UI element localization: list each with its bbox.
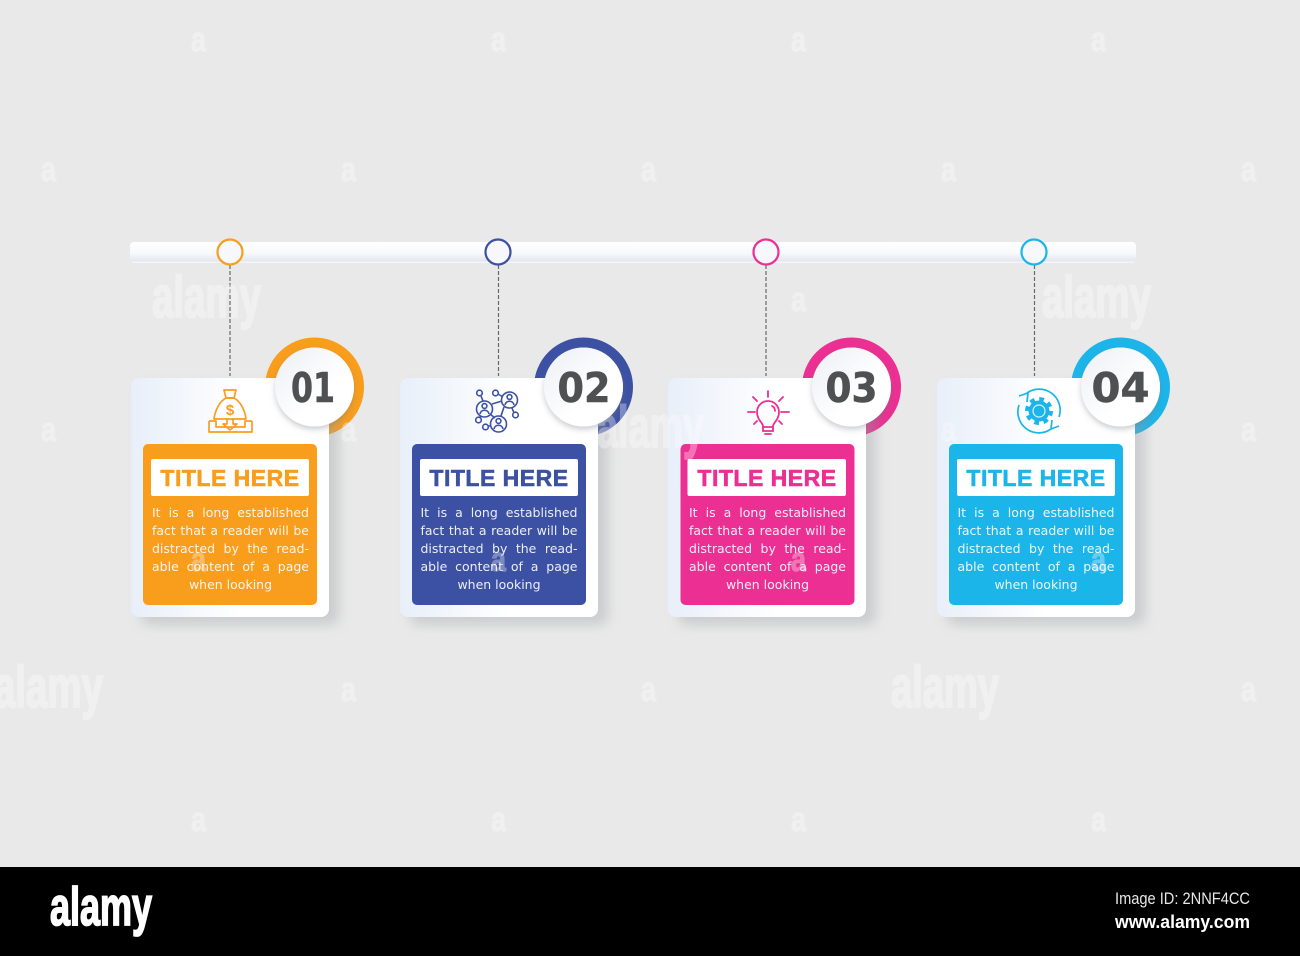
number badge: 04 [1091,364,1149,412]
card base [400,378,598,617]
body text: It is a long established [689,505,846,520]
watermarks: a [791,281,807,319]
icon: money bag over tray [209,390,252,432]
watermarks: a [341,671,357,709]
watermarks: a [341,411,357,449]
title box: TITLE HERE [697,465,837,491]
watermarks: a [191,801,207,839]
watermarks: a [941,411,957,449]
number badge [812,348,891,426]
number ring [538,342,628,432]
number ring [270,342,359,432]
watermarks: alamy [597,395,704,460]
card base [131,378,329,617]
watermarks: a [791,801,807,839]
icon: gear with cycle arrows [1017,389,1060,433]
watermarks: alamy [1042,265,1151,330]
watermarks: alamy [891,655,999,720]
body text: distracted by the read- [420,541,578,556]
colored panel [412,444,586,605]
body text [152,505,309,592]
body text: fact that a reader will be [958,523,1114,538]
title box [956,459,1114,496]
step 1 card [131,266,364,628]
icon: money bag over tray: $ [226,402,235,419]
watermarks: a [491,21,507,59]
watermarks: a [1241,411,1257,449]
step 3 card [668,266,901,628]
step 2 card [400,266,633,628]
card base [668,378,866,617]
number ring [1076,342,1164,432]
website: www.alamy.com [1114,912,1250,932]
title box: TITLE HERE [429,465,568,491]
connector line [765,265,767,376]
body text: fact that a reader will be [420,523,578,538]
title box: TITLE HERE [160,465,300,491]
icon: light bulb [748,391,789,434]
body text: fact that a reader will be [689,523,846,538]
watermarks: a [191,21,207,59]
watermarks: a [641,671,657,709]
body text [958,505,1114,592]
colored panel [143,444,317,605]
watermarks: alamy [152,265,261,330]
watermarks: a [791,21,807,59]
watermarks: a [341,151,357,189]
title box [420,459,578,496]
body text: able content of a page [152,559,309,574]
connector line [497,265,499,376]
timeline bar [130,242,1136,263]
body text: when looking [994,577,1078,592]
watermarks: a [1241,671,1257,709]
body text: It is a long established [152,505,309,520]
watermarks: a [41,411,57,449]
title box [688,459,846,496]
body text: distracted by the read- [958,541,1114,556]
watermarks: a [791,541,807,579]
icon: people network [475,390,518,432]
number badge: 03 [826,364,878,412]
footer logo: alamy [50,877,152,937]
colored panel [948,444,1122,605]
body text: when looking [457,577,541,592]
connector line [1033,265,1035,376]
timeline nodes [216,238,1048,266]
title box [151,459,309,496]
footer bar [0,867,1300,956]
body text: when looking [726,577,809,592]
watermarks: a [491,801,507,839]
title box: TITLE HERE [966,465,1105,491]
body text: distracted by the read- [689,541,846,556]
number badge: 01 [291,364,335,412]
watermarks: a [1091,541,1107,579]
body text: It is a long established [958,505,1114,520]
body text [689,505,846,592]
watermarks: a [941,151,957,189]
watermarks: a [1091,21,1107,59]
body text: distracted by the read- [152,541,309,556]
watermarks: a [491,541,507,579]
card base [936,378,1134,617]
connector line [229,265,231,376]
watermarks: a [1091,801,1107,839]
step 4 card [937,266,1170,628]
watermarks: a [191,541,207,579]
colored panel [680,444,854,605]
number badge: 02 [557,364,610,412]
body text: able content of a page [420,559,578,574]
image id: Image ID: 2NNF4CC [1115,889,1250,908]
body text: fact that a reader will be [152,523,309,538]
body text: able content of a page [689,559,846,574]
number badge [1080,348,1160,426]
watermarks: a [641,151,657,189]
body text: when looking [189,577,272,592]
watermarks: a [41,151,57,189]
watermarks: a [1241,151,1257,189]
body text: It is a long established [420,505,578,520]
body text [420,505,578,592]
body text: able content of a page [958,559,1114,574]
number badge [275,348,354,426]
number badge [544,348,622,426]
number ring [807,342,896,432]
